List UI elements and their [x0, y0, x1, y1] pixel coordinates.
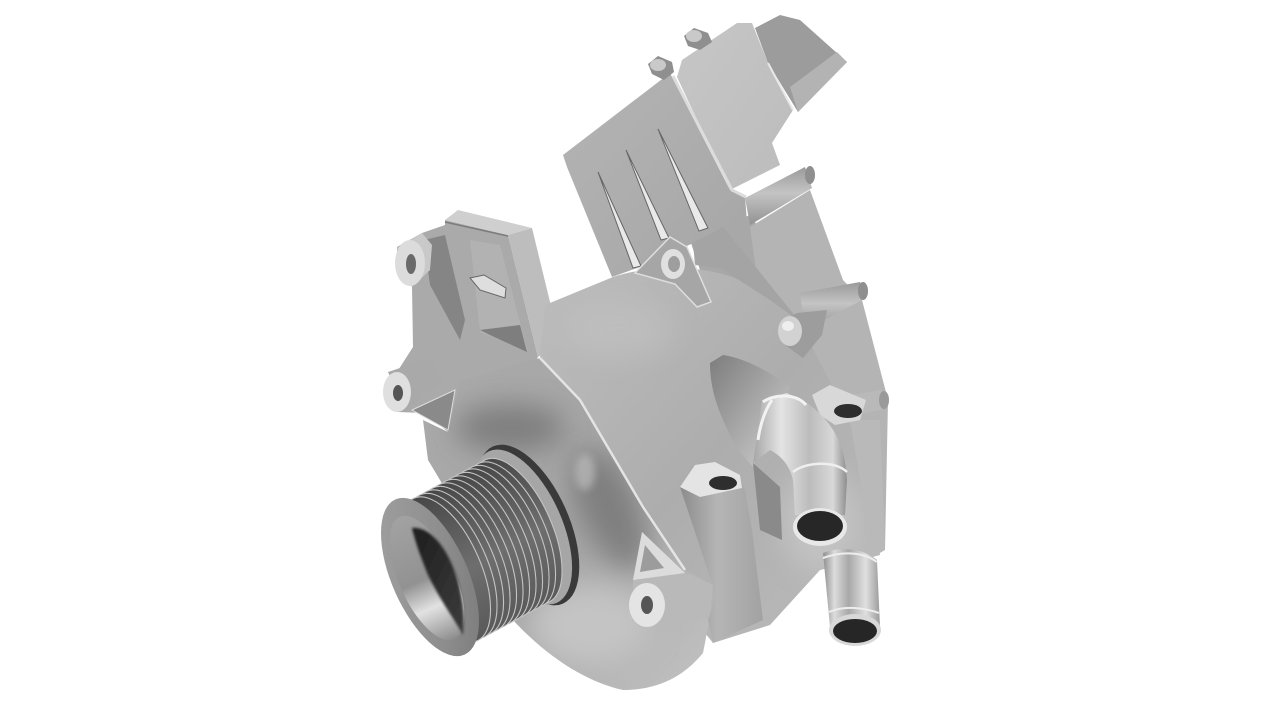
elbow pipe bracket — [753, 463, 782, 540]
lower lug — [383, 358, 443, 412]
plate edge highlight — [673, 76, 746, 197]
front flange — [361, 484, 499, 670]
embossed housing pad — [710, 355, 790, 467]
rear cover plate — [563, 15, 889, 570]
right mount lug — [778, 310, 827, 358]
upper outlet boss — [812, 385, 866, 425]
product illustration: cast metal motor unit — [381, 15, 889, 690]
upper lug — [395, 233, 432, 287]
gusset — [412, 390, 455, 430]
rear flange — [456, 430, 600, 620]
wing flap — [755, 15, 847, 112]
upper elbow coolant pipe — [753, 393, 847, 546]
left mounting bracket — [383, 210, 560, 432]
lower coolant pipe — [823, 549, 881, 646]
rear right housing edge — [850, 420, 885, 560]
upper side rib — [745, 166, 815, 225]
bracket web — [424, 235, 465, 340]
bracket side wall — [508, 228, 560, 357]
lower side rib — [830, 390, 889, 420]
pulley bore — [374, 505, 480, 651]
housing shading — [565, 300, 860, 570]
disc seam — [540, 358, 685, 570]
main cylindrical housing — [540, 268, 880, 643]
lower front mounting lug — [629, 532, 713, 632]
bracket top plate — [445, 210, 532, 235]
cover mount lug — [635, 227, 800, 322]
ribbed pulley — [361, 430, 600, 670]
lower plate — [750, 190, 888, 570]
central coolant boss — [680, 462, 763, 643]
front end cover disc — [423, 358, 713, 690]
upper light face — [677, 23, 793, 190]
cover slots — [598, 129, 708, 268]
grooves — [382, 446, 581, 655]
disc shading — [455, 404, 664, 665]
top bolts — [648, 28, 712, 80]
slotted front face — [563, 73, 747, 277]
middle side rib — [800, 282, 868, 330]
backing behind lower plate — [690, 215, 810, 300]
